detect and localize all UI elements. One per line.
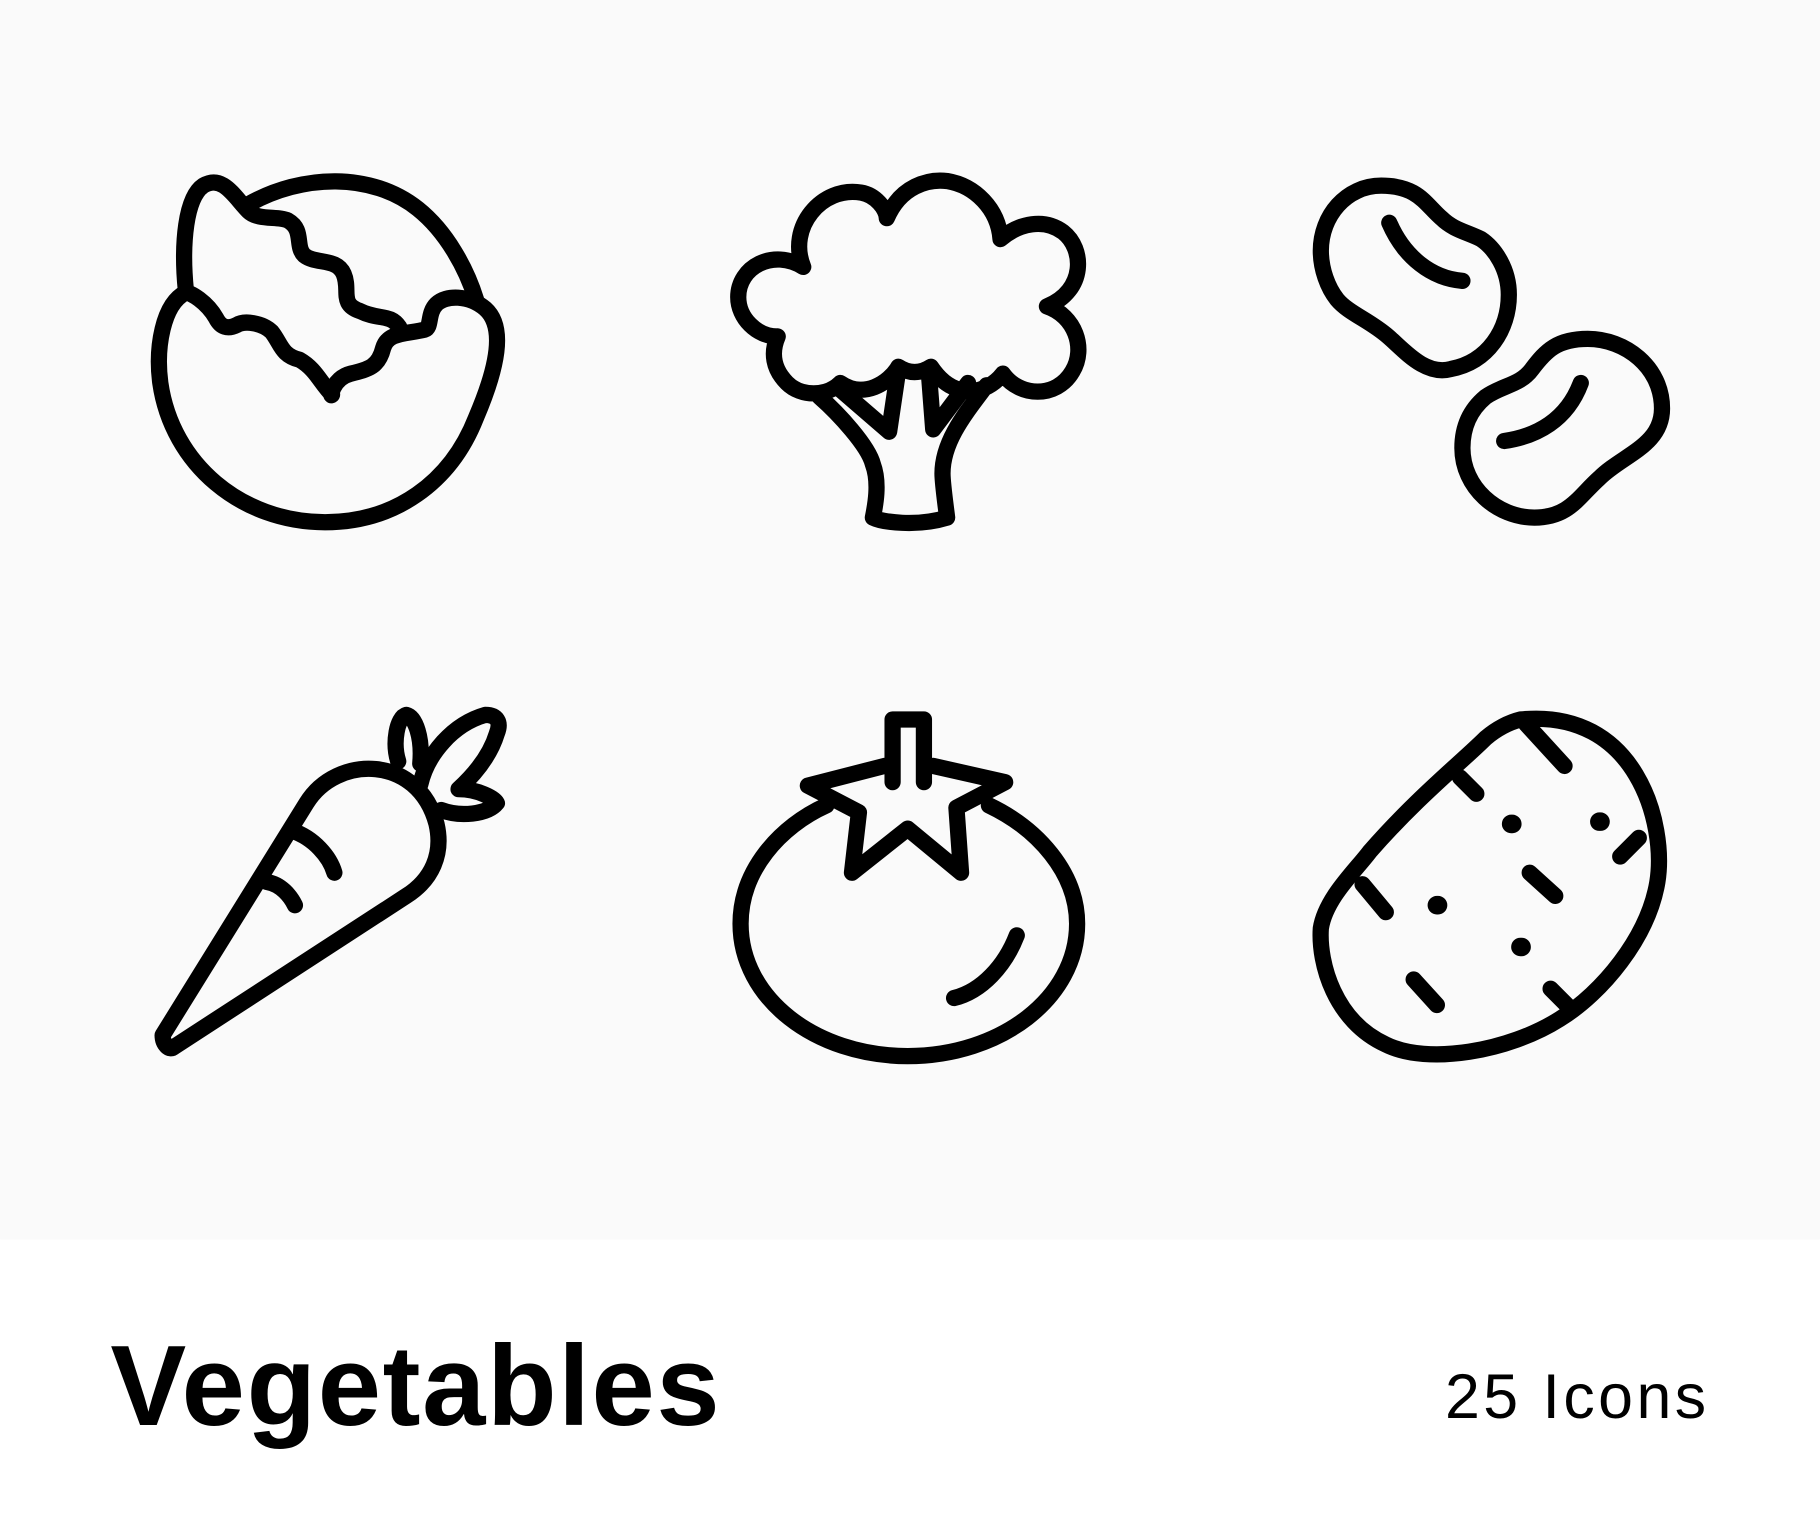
icon: broccoli xyxy=(738,181,1078,523)
icon: carrot xyxy=(163,715,499,1048)
subtitle: icon count: 25 Icons xyxy=(1445,1362,1706,1432)
icons group xyxy=(159,181,1662,1056)
icon: cabbage xyxy=(159,181,497,522)
icon: tomato xyxy=(741,720,1077,1056)
icon: beans xyxy=(1321,186,1662,518)
icon: potato xyxy=(1321,719,1659,1054)
title: Vegetables xyxy=(110,1323,720,1450)
